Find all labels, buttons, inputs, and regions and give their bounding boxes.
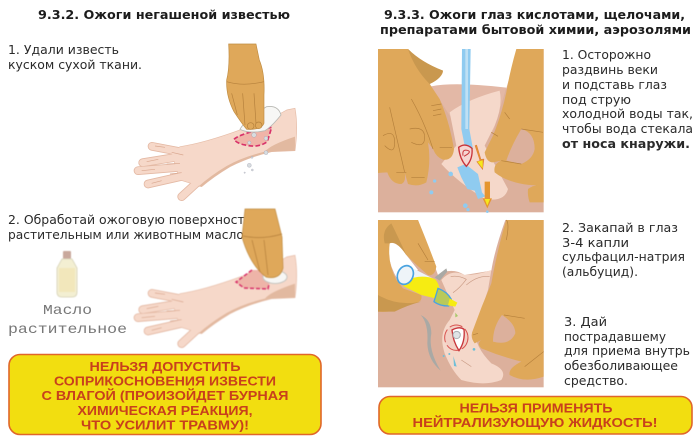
step 2 text: 3-4 капли xyxy=(562,236,629,250)
step 2 text: 2. Закапай в глаз xyxy=(562,221,678,235)
bottle label: растительное xyxy=(8,322,127,338)
illustration: flushing eye with water xyxy=(378,49,544,213)
heading: quicklime burns: 9.3.2. Ожоги негашеной известью xyxy=(38,7,290,22)
step 3 text: пострадавшему xyxy=(564,330,666,344)
step 1 text: чтобы вода стекала xyxy=(562,122,693,136)
step 2 text: (альбуцид). xyxy=(562,265,638,279)
step 2 text xyxy=(562,221,685,279)
illustration: hand wiping lime from arm xyxy=(138,44,297,197)
panel: chemical eye burns xyxy=(378,7,693,434)
step 1 text: от носа кнаружи. xyxy=(562,137,690,151)
step 3 text: для приема внутрь xyxy=(564,344,690,358)
illustration: eye drops xyxy=(378,220,544,387)
warning box: neutralising liquid xyxy=(379,396,692,434)
step 3 text: 3. Дай xyxy=(564,315,607,329)
warning box: neutralising liquid: НЕЛЬЗЯ ПРИМЕНЯТЬ xyxy=(460,400,612,416)
step 1 text: и подставь глаз xyxy=(562,78,667,92)
panel: quicklime burns xyxy=(8,7,321,434)
step 1 text xyxy=(562,48,693,151)
warning box: lime and moisture: СОПРИКОСНОВЕНИЯ ИЗВЕСТИ xyxy=(54,374,276,388)
heading: chemical eye burns: препаратами бытовой химии, аэрозолями xyxy=(380,22,691,37)
heading: chemical eye burns xyxy=(380,7,691,37)
warning box: neutralising liquid: НЕЙТРАЛИЗУЮЩУЮ ЖИДКОСТЬ! xyxy=(412,415,658,430)
warning box: lime and moisture xyxy=(9,354,321,434)
step 1 text: под струю xyxy=(562,93,631,107)
warning box: lime and moisture: НЕЛЬЗЯ ДОПУСТИТЬ xyxy=(90,359,240,374)
step 3 text: средство. xyxy=(564,374,628,388)
step 2 text xyxy=(8,213,257,242)
step 1 text: 1. Удали известь xyxy=(8,43,119,57)
illustration: hand applying oil to arm xyxy=(138,209,297,344)
step 2 text: сульфацил-натрия xyxy=(562,250,685,264)
step 3 text xyxy=(564,315,690,388)
heading: chemical eye burns: 9.3.3. Ожоги глаз кислотами, щелочами, xyxy=(384,7,685,22)
bottle label: Масло xyxy=(43,303,92,319)
bottle label xyxy=(8,303,127,338)
warning box: lime and moisture: С ВЛАГОЙ (ПРОИЗОЙДЕТ БУРНАЯ xyxy=(42,388,288,403)
step 1 text: раздвинь веки xyxy=(562,63,658,77)
step 1 text: куском сухой ткани. xyxy=(8,58,142,72)
step 1 text: холодной воды так, xyxy=(562,107,693,121)
step 2 text: растительным или животным маслом. xyxy=(8,228,257,242)
step 1 text: 1. Осторожно xyxy=(562,48,651,62)
warning box: lime and moisture: ЧТО УСИЛИТ ТРАВМУ)! xyxy=(81,418,249,432)
step 2 text: 2. Обработай ожоговую поверхность xyxy=(8,213,252,227)
step 3 text: обезболивающее xyxy=(564,359,678,373)
icon: oil bottle xyxy=(57,251,77,297)
step 1 text xyxy=(8,43,142,72)
warning box: lime and moisture: ХИМИЧЕСКАЯ РЕАКЦИЯ, xyxy=(78,403,252,418)
